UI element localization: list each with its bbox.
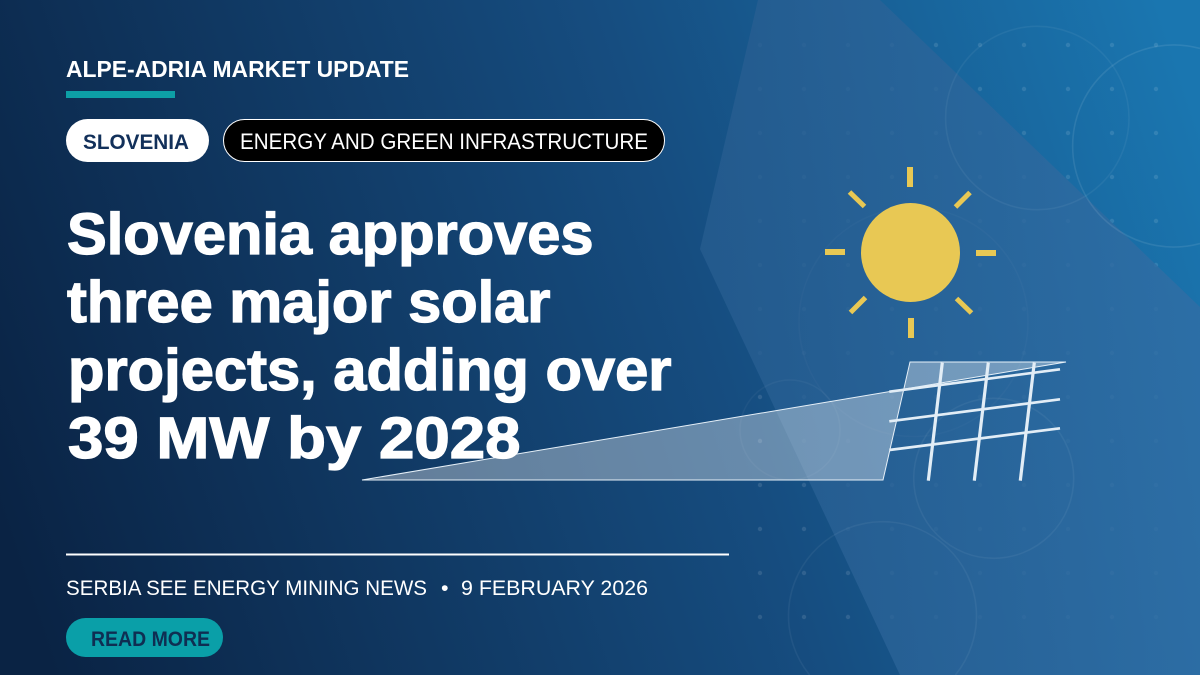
tag: Slovenia	[66, 119, 209, 162]
source and date	[66, 576, 648, 600]
tag: Slovenia: SLOVENIA	[83, 130, 189, 154]
dot grid pattern	[738, 23, 1178, 639]
eyebrow heading: ALPE-ADRIA MARKET UPDATE	[66, 56, 409, 82]
divider line	[66, 554, 729, 556]
title: three major solar	[67, 270, 550, 335]
read more button: READ MORE	[91, 628, 210, 651]
source and date: •	[441, 576, 449, 600]
title: Slovenia approves	[67, 202, 594, 267]
teal accent bar	[66, 91, 175, 98]
decorative outline circles	[740, 26, 1200, 675]
read more button	[66, 618, 223, 657]
solar panel body	[362, 362, 1066, 480]
icon: sun	[825, 167, 996, 338]
tag: Energy and Green Infrastructure: ENERGY AND GREEN INFRASTRUCTURE	[240, 129, 648, 154]
icon: solar panel	[362, 362, 1066, 481]
solar panel grid	[889, 363, 1060, 481]
title	[67, 202, 672, 471]
light angular polygon	[700, 0, 1200, 675]
title: projects, adding over	[68, 338, 672, 403]
sun rays	[825, 167, 996, 338]
tag: Energy and Green Infrastructure	[224, 120, 664, 162]
source and date: 9 FEBRUARY 2026	[461, 576, 648, 600]
title: 39 MW by 2028	[68, 406, 520, 471]
sun disc	[861, 203, 960, 302]
source and date: SERBIA SEE ENERGY MINING NEWS	[66, 576, 427, 600]
